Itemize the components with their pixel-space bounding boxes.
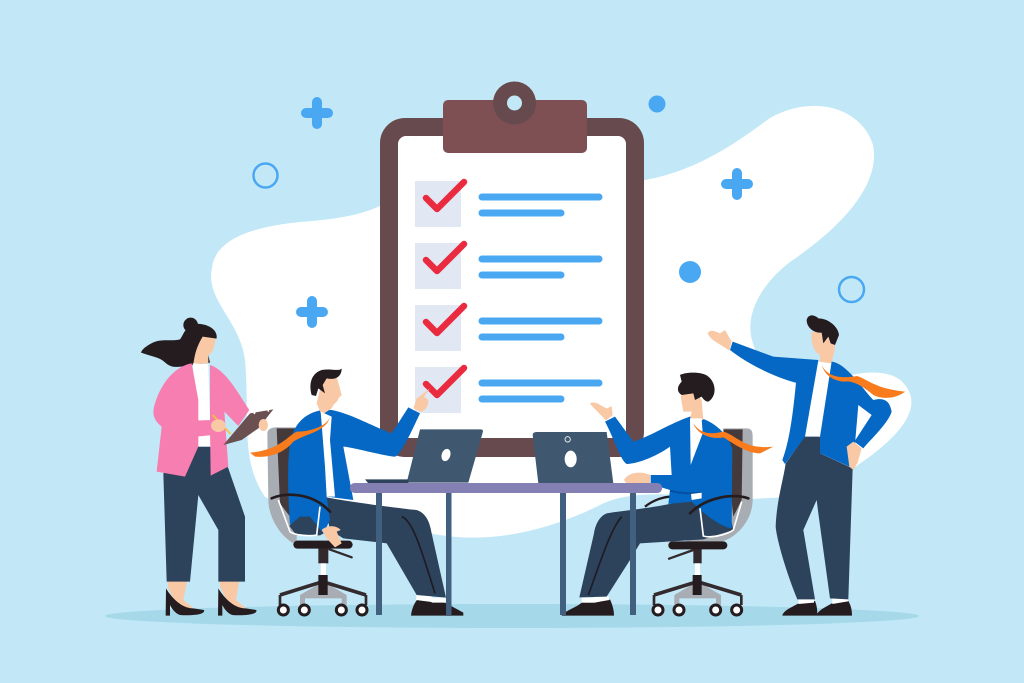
socks [416,594,446,603]
checklist row 3 [415,305,599,351]
icon: dot middle [679,261,701,283]
tie [822,365,905,398]
hair [807,315,839,345]
shoes [562,599,614,616]
seated man left with chair [250,368,463,616]
jacket [605,417,732,528]
laptop right [533,432,613,483]
hair [678,373,715,402]
icon: ring left [254,164,278,188]
table leg 3 [560,490,566,615]
chair base [653,549,742,615]
woman with clipboard [141,318,273,616]
neck and face [811,332,835,365]
table leg 4 [630,490,636,615]
jacket right side [820,362,892,467]
hand holding pencil [211,419,226,432]
jacket [288,407,420,533]
hair [141,318,217,367]
pink blazer [153,363,249,477]
clipboard [380,82,644,457]
far armrest [645,497,672,507]
chair back [267,427,330,543]
small clipboard [223,409,273,445]
table [350,483,662,615]
seated man right with chair [562,373,773,616]
laptop logo [565,451,577,467]
icon: plus left [301,301,323,323]
chair seat [293,541,353,549]
table leg 1 [376,490,382,615]
shirt hem [691,493,702,500]
trousers [323,497,446,598]
table top [350,483,662,493]
hand on hip [847,442,862,470]
armrest [272,495,330,512]
board frame [380,118,644,457]
hand holding clipboard [259,419,268,431]
trousers [579,500,733,597]
clip hole [507,96,522,110]
laptop left [365,429,483,483]
neck and face [681,390,703,420]
checklist row 4 [415,367,599,413]
laptop logo [440,448,452,462]
trousers [776,436,853,599]
face [193,337,215,364]
shirt [321,412,335,497]
clip [443,100,587,153]
laptop screen [533,432,613,483]
armrest [690,496,748,513]
shirt [690,418,703,465]
laptop screen [407,429,483,483]
neck and face [317,375,342,415]
hand on thigh [322,526,342,547]
armrest support [278,500,320,536]
hand on table [624,473,650,483]
standing man right [708,315,905,616]
icon: plus top left [306,102,328,124]
table leg 2 [446,490,452,615]
chair back inner [277,428,295,517]
raised hand [708,330,732,351]
trouser seam [588,517,622,595]
armrest support [700,502,742,537]
jacket left side [730,342,818,464]
icon: ring right [839,277,864,302]
icon: plus right [726,173,748,195]
heels [166,588,256,616]
laptop base [365,479,408,483]
tie [693,423,773,453]
floor shadow [105,604,919,628]
chair base [278,548,367,615]
chair seat [668,541,727,549]
shirt [805,362,832,437]
jacket crease [670,491,702,493]
legs skin [167,580,247,609]
shoes [411,598,463,616]
tie [250,417,330,457]
pointing hand [413,388,430,412]
trousers [163,447,245,582]
clip ring [493,82,536,124]
paper [398,136,626,438]
checklist row 1 [415,181,599,227]
trouser seam [402,517,435,593]
shoes [782,601,852,616]
socks [798,598,848,604]
icon: dot top [648,96,666,112]
socks [582,595,609,603]
blazer sleeve [162,420,213,439]
raised hand [590,403,613,421]
chair back inner [723,429,743,517]
hip under jacket [289,515,330,535]
hair [310,368,342,396]
white blob [211,106,911,538]
clipboard clip [254,407,268,414]
chair back [687,428,753,542]
decorations [254,96,864,323]
laptop camera ring [565,437,570,442]
checklist row 2 [415,243,599,289]
shirt [193,363,211,447]
pencil [213,415,231,434]
